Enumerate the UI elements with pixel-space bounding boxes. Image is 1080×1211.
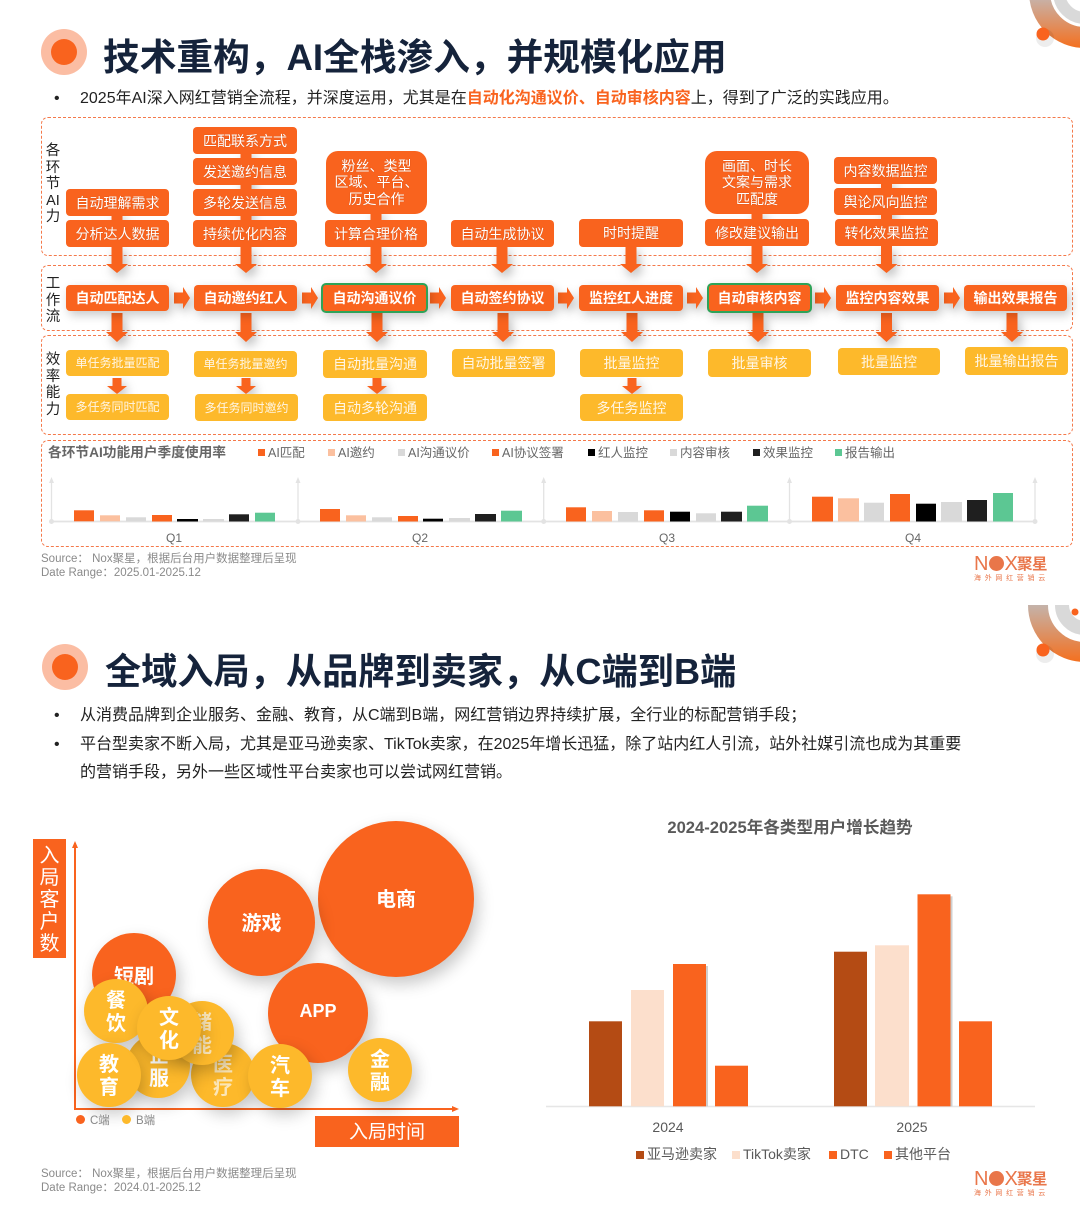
panel label: AI capability: 环 bbox=[46, 160, 60, 176]
efficiency: column 7 bbox=[838, 348, 940, 375]
workflow step: report bbox=[964, 285, 1067, 311]
bubble: energy storage: 储 bbox=[192, 1012, 212, 1034]
bubble: education bbox=[77, 1043, 141, 1107]
efficiency: column 6: 批量审核 bbox=[732, 355, 788, 371]
bullet text: section two: • bbox=[54, 707, 60, 724]
box: 历史合作 bbox=[348, 191, 404, 207]
bullet text: section two: • bbox=[54, 736, 60, 752]
box bbox=[66, 189, 169, 216]
bullet text: section one: • bbox=[54, 90, 60, 107]
axis label: customers: 数 bbox=[40, 933, 60, 955]
legend item: AI匹配 bbox=[268, 446, 305, 460]
bubble: e-commerce: 电商 bbox=[376, 889, 416, 911]
box: 单任务批量匹配 bbox=[75, 356, 160, 370]
logo: section one: 海外网红营销云 bbox=[974, 575, 1049, 582]
axis label: customers bbox=[33, 839, 66, 958]
bubble: finance: 融 bbox=[370, 1072, 390, 1094]
efficiency: column 7: 批量监控 bbox=[861, 354, 917, 370]
bubble: games bbox=[208, 869, 315, 976]
legend item: AI邀约 bbox=[338, 446, 375, 460]
bubble: culture bbox=[137, 996, 201, 1060]
logo: section one: N X bbox=[974, 553, 1018, 575]
workflow step: monitor content: 监控内容效果 bbox=[846, 290, 930, 306]
source note: section one: Source： Nox聚星，根据后台用户数据整理后呈现 bbox=[41, 553, 297, 565]
bullet text: section two: 平台型卖家不断入局，尤其是亚马逊卖家、TikTok卖家，在2025年增长迅猛，除了站内红人引流，站外社媒引流也成为其重要 bbox=[80, 736, 961, 752]
panel label: efficiency bbox=[46, 351, 60, 418]
box: 匹配度 bbox=[736, 191, 778, 207]
box: 批量监控 bbox=[604, 355, 660, 371]
box bbox=[325, 220, 427, 247]
efficiency: column 6 bbox=[708, 349, 811, 377]
box: 分析达人数据 bbox=[76, 226, 160, 242]
bubble: enterprise services bbox=[126, 1034, 190, 1098]
bubble: medical: 疗 bbox=[213, 1077, 233, 1099]
box: 画面、时长 bbox=[722, 158, 792, 174]
title: section two: 全域入局，从品牌到卖家，从C端到B端 bbox=[105, 651, 736, 692]
panel label: efficiency: 效 bbox=[46, 352, 60, 368]
logo: section two: 海外网红营销云 bbox=[974, 1190, 1049, 1197]
box bbox=[195, 394, 298, 421]
bubble: automotive: 汽 bbox=[270, 1055, 290, 1077]
logo: section one bbox=[974, 553, 1049, 582]
chart legend bbox=[258, 446, 895, 460]
legend: C end: C端 bbox=[90, 1115, 110, 1127]
box: 区域、平台、 bbox=[334, 174, 418, 190]
legend item: 效果监控 bbox=[763, 446, 813, 460]
box: 发送邀约信息 bbox=[203, 164, 287, 180]
bullet text: section two: 从消费品牌到企业服务、金融、教育，从C端到B端，网红营销边界持续扩展，全行业的标配营销手段； bbox=[80, 707, 806, 724]
workflow step: monitor content bbox=[836, 285, 939, 311]
axis label: entry time bbox=[315, 1116, 459, 1147]
column 5: AI capability box bbox=[579, 219, 683, 247]
box bbox=[835, 219, 938, 246]
chart heading: 各环节AI功能用户季度使用率 bbox=[48, 445, 226, 460]
legend item: AI协议签署 bbox=[502, 446, 564, 460]
header icon: section one bbox=[41, 29, 87, 75]
panel label: AI capability: 节 bbox=[46, 176, 60, 192]
bar chart: quarterly usage: Q3 bbox=[659, 531, 675, 545]
bar chart: growth trend: 2025 bbox=[896, 1119, 928, 1135]
axis label: entry time: 入局时间 bbox=[349, 1122, 425, 1143]
legend: DTC: DTC bbox=[840, 1146, 869, 1162]
bubble: automotive: 车 bbox=[270, 1078, 290, 1100]
box: 转化效果监控 bbox=[844, 224, 928, 240]
bubble: education: 教 bbox=[99, 1054, 119, 1076]
box: 匹配联系方式 bbox=[203, 132, 287, 148]
column 7: AI capability boxes bbox=[834, 157, 938, 246]
bubble: energy storage bbox=[170, 1001, 234, 1065]
bubble: energy storage: 能 bbox=[192, 1035, 212, 1057]
box: 修改建议输出 bbox=[715, 224, 799, 240]
workflow step: sign: 自动签约协议 bbox=[460, 290, 544, 306]
box bbox=[194, 351, 297, 377]
bullet text: section one: 2025年AI深入网红营销全流程，并深度运用，尤其是在自动化沟通议价、自动审核内容上，得到了广泛的实践应用。 bbox=[80, 90, 899, 107]
legend: other platforms: 其他平台 bbox=[895, 1146, 951, 1162]
box bbox=[705, 219, 809, 246]
source note: section one: Date Range：2025.01-2025.12 bbox=[41, 566, 201, 578]
box bbox=[193, 220, 297, 247]
panel: AI capability per stage bbox=[41, 117, 1073, 256]
source note: section two: Date Range：2024.01-2025.12 bbox=[41, 1182, 201, 1194]
efficiency: column 8 bbox=[965, 347, 1068, 375]
bubble chart axes bbox=[72, 841, 459, 1112]
header icon: section two bbox=[42, 644, 88, 690]
axis label: customers: 入 bbox=[40, 845, 60, 867]
logo: section two: 聚星 bbox=[1017, 1171, 1047, 1188]
box: 多任务同时匹配 bbox=[75, 400, 160, 414]
bar chart: quarterly usage: Q2 bbox=[412, 531, 428, 545]
bubble: short drama bbox=[92, 933, 176, 1017]
efficiency: column 1 bbox=[66, 350, 169, 420]
panel label: efficiency: 力 bbox=[46, 402, 60, 418]
box: 计算合理价格 bbox=[334, 226, 418, 242]
legend: Amazon: 亚马逊卖家 bbox=[647, 1146, 717, 1162]
box: 自动多轮沟通 bbox=[333, 400, 417, 416]
workflow step: report: 输出效果报告 bbox=[974, 290, 1058, 306]
bubble: education: 育 bbox=[99, 1077, 119, 1099]
bubble: culture: 化 bbox=[159, 1030, 179, 1052]
bubble: short drama: 短剧 bbox=[114, 966, 154, 988]
bubble: games: 游戏 bbox=[242, 912, 282, 934]
bubble: enterprise services: 服 bbox=[149, 1068, 169, 1090]
source note: section two bbox=[41, 1167, 297, 1194]
workflow step: monitor influencer: 监控红人进度 bbox=[589, 290, 673, 306]
bar chart: growth trend: 2024 bbox=[652, 1119, 684, 1135]
panel label: workflow: 流 bbox=[46, 309, 60, 325]
bubble: catering bbox=[84, 979, 148, 1043]
bubble: automotive bbox=[248, 1044, 312, 1108]
panel label: workflow: 作 bbox=[46, 292, 60, 308]
axis label: customers: 局 bbox=[40, 867, 60, 889]
box: 多任务监控 bbox=[596, 400, 666, 416]
axis label: customers: 客 bbox=[40, 889, 60, 911]
box: 自动理解需求 bbox=[76, 194, 160, 210]
growth chart legend bbox=[636, 1146, 951, 1162]
box: 自动批量沟通 bbox=[333, 356, 417, 372]
bar chart: quarterly usage: Q1 bbox=[166, 531, 182, 545]
column 6: AI capability boxes bbox=[705, 151, 809, 246]
bubble: app: APP bbox=[299, 1001, 336, 1021]
panel label: efficiency: 率 bbox=[46, 368, 60, 384]
panel label: AI capability: 各 bbox=[46, 143, 60, 159]
workflow step: review, highlighted bbox=[707, 283, 812, 313]
panel label: workflow: 工 bbox=[46, 276, 60, 292]
box: 粉丝、类型 bbox=[342, 158, 412, 174]
workflow step: invite: 自动邀约红人 bbox=[204, 290, 288, 306]
efficiency: column 3 bbox=[323, 350, 427, 421]
workflow step: negotiate, highlighted: 自动沟通议价 bbox=[332, 290, 416, 306]
box bbox=[323, 350, 427, 378]
workflow step: invite bbox=[194, 285, 297, 311]
workflow step: match bbox=[66, 285, 169, 311]
legend: B end bbox=[122, 1114, 155, 1127]
legend item: 红人监控 bbox=[598, 446, 648, 460]
box: 舆论风向监控 bbox=[844, 194, 928, 210]
source note: section two: Source： Nox聚星，根据后台用户数据整理后呈现 bbox=[41, 1168, 297, 1180]
bubble: enterprise services: 企 bbox=[149, 1045, 169, 1067]
chart title: growth trend: 2024-2025年各类型用户增长趋势 bbox=[667, 818, 913, 837]
box: 多轮发送信息 bbox=[203, 194, 287, 210]
box: 文案与需求 bbox=[722, 174, 792, 190]
panel label: efficiency: 能 bbox=[46, 385, 60, 401]
panel: quarterly usage chart bbox=[41, 440, 1073, 547]
column 3: AI capability boxes bbox=[325, 151, 427, 247]
efficiency: column 2 bbox=[194, 351, 298, 421]
box bbox=[193, 189, 297, 216]
box bbox=[66, 350, 169, 376]
box bbox=[705, 151, 809, 214]
decorative corner: section two bbox=[1028, 605, 1080, 663]
box bbox=[834, 157, 937, 184]
column 1: AI capability boxes bbox=[66, 189, 169, 247]
logo: section one: 聚星 bbox=[1017, 556, 1047, 573]
logo: section two bbox=[974, 1168, 1048, 1200]
efficiency: column 8: 批量输出报告 bbox=[974, 353, 1058, 369]
box: 多任务同时邀约 bbox=[204, 400, 288, 414]
axis label: customers: 户 bbox=[40, 911, 60, 933]
bullet text: section two: 的营销手段，另外一些区域性平台卖家也可以尝试网红营销。 bbox=[80, 764, 512, 781]
workflow step: review, highlighted: 自动审核内容 bbox=[718, 290, 802, 306]
bubble: finance bbox=[348, 1038, 412, 1102]
bubble: medical bbox=[191, 1043, 255, 1107]
legend item: 报告输出 bbox=[845, 446, 895, 460]
legend item: 内容审核 bbox=[680, 446, 730, 460]
workflow step: negotiate, highlighted bbox=[321, 283, 428, 313]
bar chart: quarterly usage: Q4 bbox=[905, 531, 921, 545]
panel: efficiency bbox=[41, 335, 1073, 435]
box bbox=[580, 394, 683, 421]
box bbox=[323, 394, 427, 421]
box bbox=[326, 151, 427, 214]
panel label: AI capability bbox=[46, 142, 60, 225]
logo: section two: N X bbox=[974, 1168, 1018, 1190]
box: 内容数据监控 bbox=[844, 162, 928, 178]
efficiency: column 4: 自动批量签署 bbox=[462, 355, 546, 371]
workflow step: monitor influencer bbox=[579, 285, 683, 311]
box bbox=[66, 220, 169, 247]
legend item: AI沟通议价 bbox=[408, 446, 470, 460]
bubble: catering: 餐 bbox=[106, 990, 126, 1012]
panel: workflow bbox=[41, 265, 1073, 331]
efficiency: column 4 bbox=[452, 349, 555, 377]
bubble legend bbox=[76, 1114, 155, 1127]
workflow step: sign bbox=[451, 285, 554, 311]
box bbox=[834, 188, 937, 215]
flow arrows and connectors bbox=[106, 154, 1027, 394]
title: section one: 技术重构，AI全栈渗入，并规模化应用 bbox=[103, 37, 727, 78]
column 2: AI capability boxes bbox=[193, 127, 297, 247]
decorative corner: top bbox=[1030, 0, 1080, 48]
box: 单任务批量邀约 bbox=[203, 357, 288, 371]
legend: C end bbox=[76, 1114, 110, 1127]
box bbox=[193, 158, 297, 185]
source note: section one bbox=[41, 552, 297, 578]
legend: B end: B端 bbox=[136, 1115, 155, 1127]
bubble: app bbox=[268, 963, 368, 1063]
bar chart: quarterly usage bbox=[49, 477, 1038, 545]
panel label: AI capability: 力 bbox=[46, 209, 60, 225]
box bbox=[66, 394, 169, 420]
bullet text: section two bbox=[54, 706, 961, 781]
box bbox=[193, 127, 297, 154]
box: 持续优化内容 bbox=[203, 226, 287, 242]
bubble: e-commerce bbox=[318, 821, 474, 977]
workflow step: match: 自动匹配达人 bbox=[76, 290, 160, 306]
panel label: workflow bbox=[46, 276, 60, 325]
column 4: AI capability box: 自动生成协议 bbox=[460, 226, 544, 242]
efficiency: column 5 bbox=[580, 349, 683, 421]
bubble: culture: 文 bbox=[159, 1007, 179, 1029]
panel label: AI capability: AI bbox=[46, 192, 60, 208]
box bbox=[580, 349, 683, 377]
bubble: catering: 饮 bbox=[106, 1013, 126, 1035]
column 5: AI capability box: 时时提醒 bbox=[603, 225, 659, 241]
column 4: AI capability box bbox=[451, 220, 554, 247]
bubble: medical: 医 bbox=[213, 1054, 233, 1076]
legend: TikTok: TikTok卖家 bbox=[743, 1146, 811, 1162]
bubble: finance: 金 bbox=[370, 1049, 390, 1071]
